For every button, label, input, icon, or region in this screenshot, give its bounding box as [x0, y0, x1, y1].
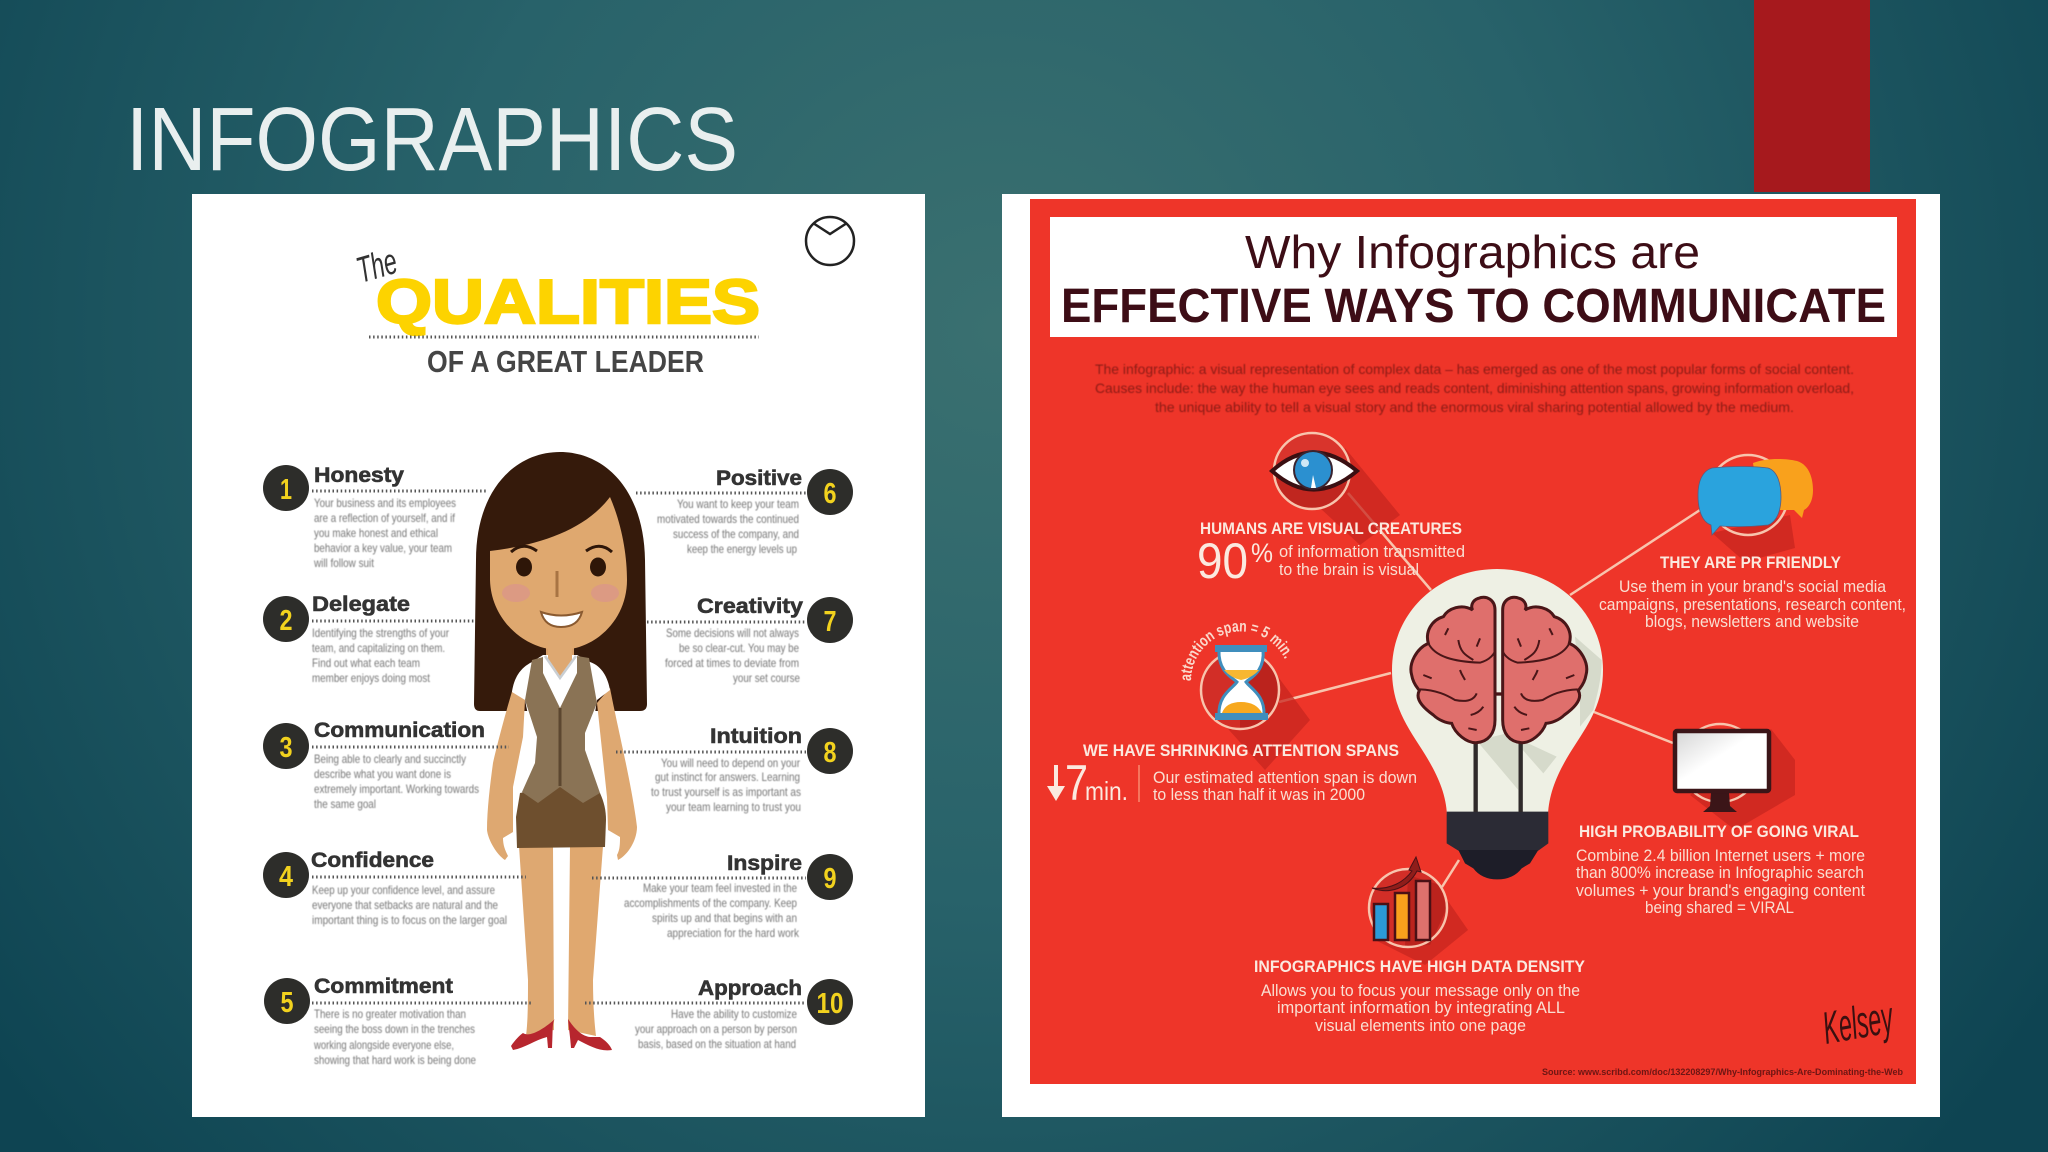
description: blogs, newsletters and website	[1645, 612, 1859, 631]
nose	[556, 571, 558, 597]
description	[665, 626, 800, 685]
title box: Why Infographics are	[1245, 226, 1700, 278]
icon: hourglass with attention span label	[1181, 623, 1310, 770]
description: Our estimated attention span is down	[1153, 768, 1417, 787]
title box	[1050, 217, 1897, 337]
description	[314, 752, 479, 811]
description: extremely important. Working towards	[314, 782, 479, 796]
item 4: confidence	[263, 849, 526, 927]
item 6: positive	[636, 467, 853, 556]
arms	[487, 688, 525, 860]
description: Have the ability to customize	[671, 1007, 797, 1021]
description: everyone that setbacks are natural and the	[312, 898, 498, 912]
stat: down to 7 minutes: min.	[1085, 776, 1128, 806]
description: being shared = VIRAL	[1645, 898, 1794, 917]
number badge 2	[263, 596, 309, 642]
intro paragraph	[1095, 361, 1854, 415]
number badge 5: 5	[280, 987, 294, 1019]
text: shrinking attention spans: WE HAVE SHRINKING ATTENTION SPANS	[1083, 741, 1399, 760]
number badge 9: 9	[824, 863, 836, 895]
description	[657, 497, 799, 556]
number badge 4	[263, 852, 309, 898]
description	[312, 883, 507, 927]
face	[490, 497, 627, 650]
icon: eye	[1272, 433, 1400, 545]
heading: Inspire	[727, 852, 802, 875]
description: Make your team feel invested in the	[643, 881, 797, 895]
description: Allows you to focus your message only on the	[1261, 981, 1580, 1000]
stat: down to 7 minutes	[1047, 755, 1128, 811]
description: Being able to clearly and succinctly	[314, 752, 466, 766]
base	[1447, 812, 1548, 851]
description	[1599, 577, 1906, 631]
number badge 10: 10	[816, 988, 844, 1020]
description	[313, 496, 456, 570]
text: they are pr friendly: THEY ARE PR FRIENDLY	[1660, 553, 1842, 572]
description: volumes + your brand's engaging content	[1576, 881, 1865, 900]
description: the same goal	[314, 797, 376, 811]
description: gut instinct for answers. Learning	[655, 770, 800, 784]
item 5: commitment	[264, 975, 533, 1067]
intro paragraph: The infographic: a visual representation of complex data – has emerged as one of the most popular forms of social content.	[1095, 361, 1854, 377]
icon: speech bubbles	[1698, 455, 1813, 562]
description	[313, 1007, 476, 1067]
description: You want to keep your team	[677, 497, 799, 511]
description: describe what you want done is	[314, 767, 451, 781]
description	[1261, 981, 1580, 1035]
description: team, and capitalizing on them.	[312, 641, 445, 655]
eyes and brows	[511, 546, 612, 576]
description: Use them in your brand's social media	[1619, 577, 1887, 596]
heading: Honesty	[314, 464, 404, 487]
number badge 1: 1	[280, 474, 292, 506]
description: Keep up your confidence level, and assure	[312, 883, 495, 897]
description: forced at times to deviate from	[665, 656, 799, 670]
description: important thing is to focus on the larger goal	[312, 913, 507, 927]
bulb glass	[1392, 569, 1603, 815]
number badge 2: 2	[280, 605, 292, 637]
heading: the qualities of a great leader: The	[352, 240, 402, 291]
legs	[519, 846, 554, 1036]
stat: down to 7 minutes: 7	[1065, 755, 1088, 811]
icon: computer monitor	[1675, 724, 1795, 830]
circular label: attention span = 5 min.	[1181, 623, 1290, 681]
number badge 8: 8	[824, 737, 836, 769]
description: You will need to depend on your	[661, 756, 800, 770]
description: There is no greater motivation than	[314, 1007, 466, 1021]
item 2: delegate	[263, 593, 475, 685]
text: they are pr friendly	[1599, 553, 1906, 631]
icon: light bulb with brain	[1392, 569, 1603, 879]
source line: Source: www.scribd.com/doc/132208297/Why-Infographics-Are-Dominating-the-Web	[1542, 1067, 1903, 1077]
text: humans are visual creatures: HUMANS ARE VISUAL CREATURES	[1200, 519, 1462, 538]
description: basis, based on the situation at hand	[638, 1037, 796, 1051]
description: Identifying the strengths of your	[312, 626, 449, 640]
vest	[522, 656, 600, 803]
item 7: creativity	[647, 595, 853, 685]
neck	[546, 630, 574, 680]
description: will follow suit	[313, 556, 375, 570]
heading: Confidence	[311, 849, 434, 872]
shoes	[511, 1019, 555, 1050]
heading: Intuition	[710, 725, 802, 748]
item 8: intuition	[616, 725, 853, 814]
description: Combine 2.4 billion Internet users + more	[1576, 846, 1865, 865]
number badge 6: 6	[824, 478, 836, 510]
description: keep the energy levels up	[687, 542, 797, 556]
filaments	[1476, 740, 1521, 812]
text: shrinking attention spans	[1047, 741, 1417, 811]
heading: Approach	[698, 977, 802, 1000]
description: you make honest and ethical	[314, 526, 438, 540]
description: your team learning to trust you	[666, 800, 801, 814]
text: high data density: INFOGRAPHICS HAVE HIGH DATA DENSITY	[1254, 957, 1586, 976]
number badge 10	[807, 979, 853, 1025]
description: motivated towards the continued	[657, 512, 799, 526]
vest seam	[558, 708, 562, 786]
description	[635, 1007, 797, 1051]
description	[624, 881, 800, 940]
description: than 800% increase in Infographic search	[1576, 863, 1864, 882]
slide title: INFOGRAPHICS	[126, 90, 738, 190]
intro paragraph: the unique ability to tell a visual story and the enormous viral sharing potential allowed by the medium.	[1155, 399, 1794, 415]
number badge 7	[807, 597, 853, 643]
description: to trust yourself is as important as	[651, 785, 801, 799]
description	[1153, 768, 1417, 804]
heading: the qualities of a great leader: QUALITIES	[376, 268, 760, 337]
number badge 4: 4	[279, 861, 293, 893]
description: visual elements into one page	[1315, 1016, 1526, 1035]
red ribbon accent	[1754, 0, 1870, 192]
description: be so clear-cut. You may be	[679, 641, 799, 655]
heading: Creativity	[697, 595, 803, 618]
description: working alongside everyone else,	[313, 1038, 454, 1052]
heading: the qualities of a great leader: OF A GREAT LEADER	[427, 344, 704, 379]
cheeks	[502, 584, 619, 602]
heading: Commitment	[314, 975, 453, 998]
connector lines	[1279, 493, 1700, 887]
description: accomplishments of the company. Keep	[624, 896, 797, 910]
number badge 6	[807, 469, 853, 515]
description: showing that hard work is being done	[314, 1053, 476, 1067]
panel: why infographics are effective	[1002, 194, 1940, 1117]
white shirt	[512, 655, 610, 745]
hair	[474, 452, 647, 711]
description	[651, 756, 801, 814]
number badge 3	[263, 723, 309, 769]
heading: Communication	[314, 719, 485, 742]
icon: clock logo	[806, 217, 854, 265]
smile	[541, 612, 582, 627]
item 1: honesty	[263, 464, 486, 570]
connector	[1495, 692, 1503, 696]
skirt	[516, 785, 606, 848]
icon: bar chart	[1369, 857, 1468, 965]
description	[1279, 542, 1465, 579]
description: important information by integrating ALL	[1277, 998, 1565, 1017]
growth arrow	[1372, 857, 1421, 891]
number badge 9	[807, 854, 853, 900]
signature: Kelsey	[1819, 991, 1898, 1054]
description: appreciation for the hard work	[667, 926, 800, 940]
description: spirits up and that begins with an	[652, 911, 797, 925]
brain cast shadow	[1478, 637, 1602, 790]
description	[1576, 846, 1865, 917]
brain left lobe	[1411, 597, 1495, 743]
intro paragraph: Causes include: the way the human eye sees and reads content, diminishing attention spans, growing information overload,	[1095, 380, 1854, 396]
heading: Delegate	[312, 593, 410, 616]
neck opening	[548, 640, 572, 677]
description: your set course	[733, 671, 800, 685]
description: campaigns, presentations, research content,	[1599, 595, 1906, 614]
text: high probability of going viral	[1576, 822, 1865, 917]
stat: 90 percent: 90	[1197, 533, 1248, 589]
brain right lobe	[1503, 597, 1587, 743]
description: are a reflection of yourself, and if	[314, 511, 456, 525]
number badge 5	[264, 978, 310, 1024]
description: member enjoys doing most	[312, 671, 431, 685]
item 3: communication	[263, 719, 509, 811]
number badge 3: 3	[280, 732, 292, 764]
description: behavior a key value, your team	[314, 541, 452, 555]
stat: 90 percent: %	[1251, 538, 1273, 568]
number badge 8	[807, 728, 853, 774]
description: to less than half it was in 2000	[1153, 785, 1365, 804]
description	[312, 626, 449, 685]
description: to the brain is visual	[1279, 560, 1419, 579]
illustration: businesswoman	[474, 452, 647, 1050]
text: high probability of going viral: HIGH PROBABILITY OF GOING VIRAL	[1579, 822, 1859, 841]
text: high data density	[1254, 957, 1586, 1035]
collar	[545, 656, 576, 678]
heading: Positive	[716, 467, 802, 490]
text: humans are visual creatures	[1197, 519, 1465, 589]
description: Some decisions will not always	[666, 626, 799, 640]
number badge 1	[263, 465, 309, 511]
title box: EFFECTIVE WAYS TO COMMUNICATE	[1061, 280, 1886, 333]
description: of information transmitted	[1279, 542, 1465, 561]
description: Find out what each team	[312, 656, 420, 670]
number badge 7: 7	[824, 606, 836, 638]
panel: qualities of a great leader	[192, 194, 925, 1117]
description: your approach on a person by person	[635, 1022, 797, 1036]
item 10: approach	[585, 977, 853, 1051]
description: Your business and its employees	[314, 496, 456, 510]
description: seeing the boss down in the trenches	[314, 1022, 475, 1036]
item 9: inspire	[592, 852, 853, 940]
description: success of the company, and	[673, 527, 799, 541]
heading: the qualities of a great leader	[352, 240, 760, 379]
